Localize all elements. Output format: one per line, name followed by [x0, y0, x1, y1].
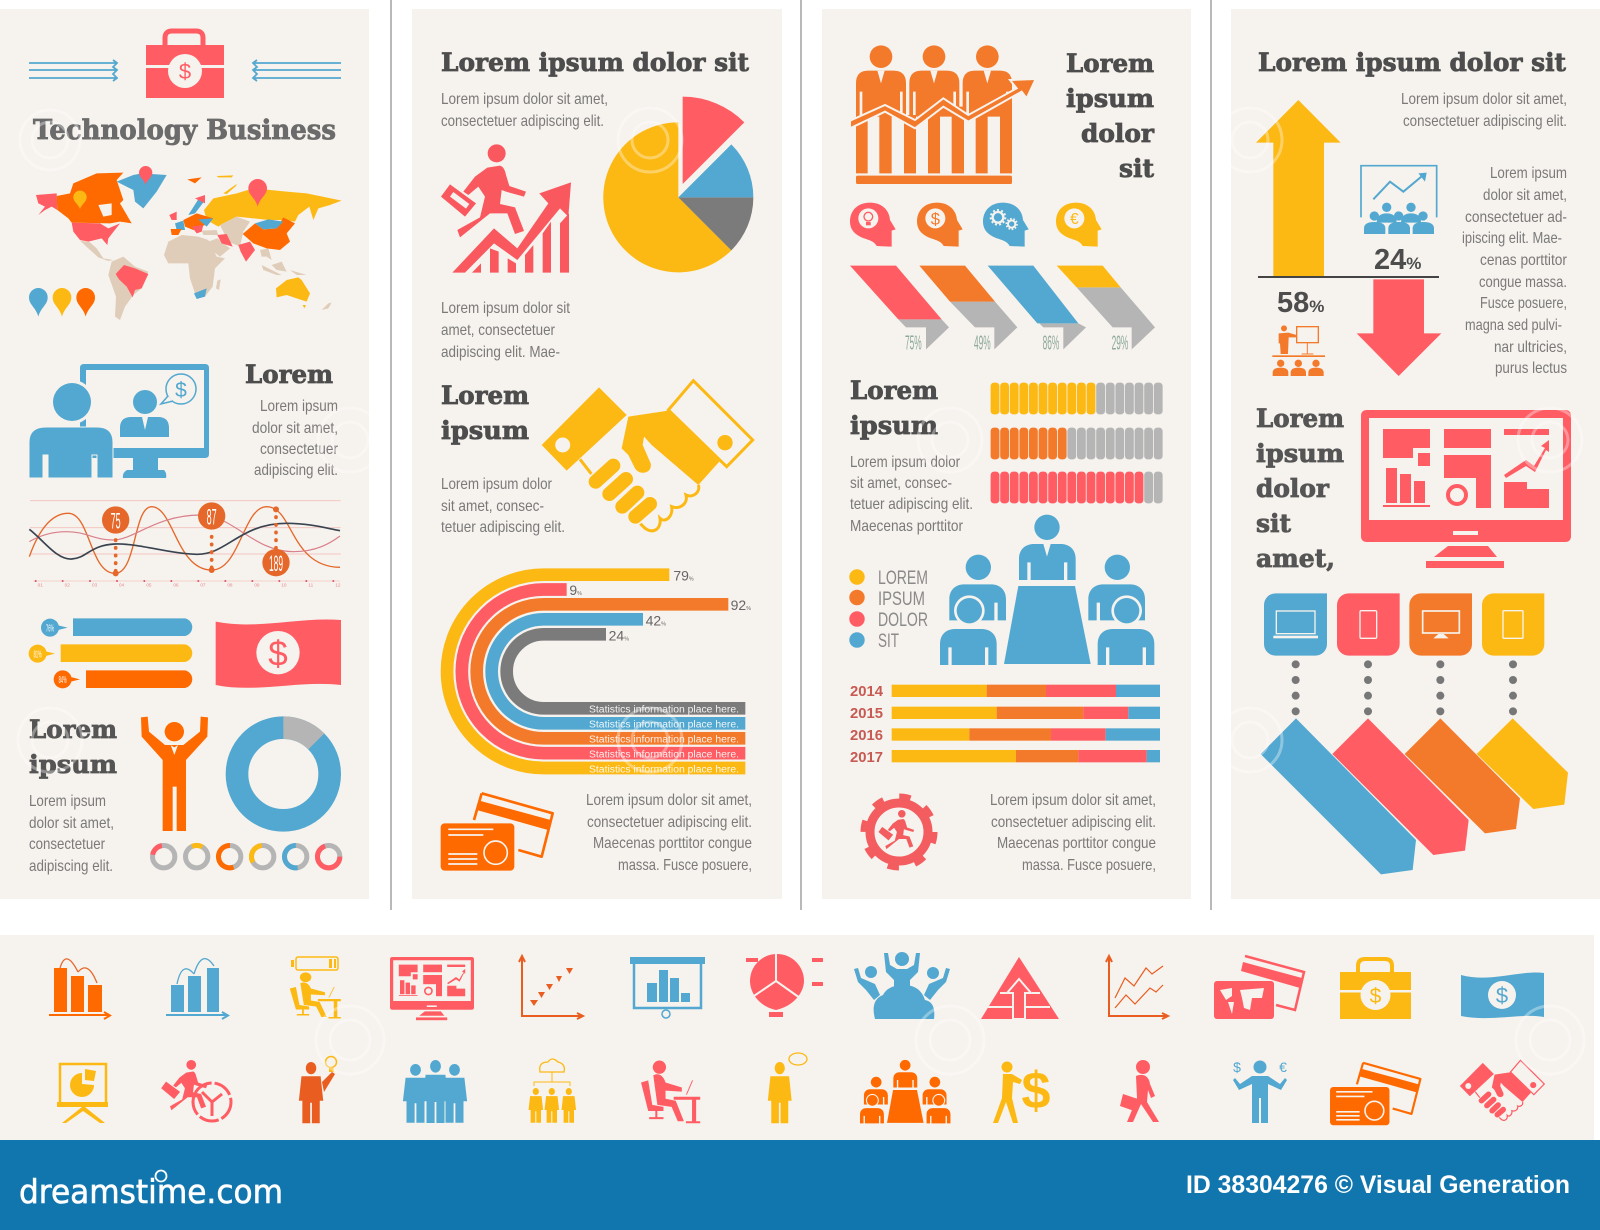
- arrows: right blue lines: [253, 60, 341, 81]
- ribbon chart: 29%: 29%: [1112, 331, 1128, 354]
- footer credit: ID 38304276 © Visual Generation: [1186, 1171, 1570, 1199]
- icon: orange cards small: [1330, 1063, 1420, 1125]
- text block: handshake: [441, 476, 565, 536]
- icon: three businessmen: [403, 1060, 467, 1123]
- icon: head with euro: [1056, 203, 1102, 247]
- text block: column three bottom: consectetuer adipiscing elit.: [991, 814, 1156, 831]
- heading: lorem ipsum two: ipsum: [441, 416, 529, 445]
- heading: lorem ipsum dolor sit stacked: ipsum: [1066, 84, 1154, 113]
- text block: column four side: dolor sit amet,: [1483, 187, 1567, 204]
- icon: pink handshake small: [1460, 1060, 1544, 1120]
- icon: projector board: [630, 957, 705, 1018]
- icon: pink cards with map: [1214, 956, 1304, 1019]
- icon: scatter axes: [519, 956, 583, 1019]
- heading: lorem ipsum three: [850, 376, 938, 440]
- device tiles: [1264, 593, 1544, 656]
- text block: handshake: Lorem ipsum dolor: [441, 476, 553, 493]
- text block: column two bottom: massa. Fusce posuere,: [618, 857, 752, 874]
- rainbow bar chart: 9%: [569, 582, 582, 598]
- icon: team on cloud: [854, 952, 950, 1019]
- text block: column four side: nar ultricies,: [1494, 339, 1567, 356]
- panel: icon strip: [0, 935, 1594, 1140]
- icon: man with dollar and euro: [1233, 1059, 1287, 1123]
- legend: LOREM: [878, 568, 928, 589]
- ribbon chart: 29%: [1057, 266, 1155, 354]
- text block: column three: tetuer adipiscing elit.: [850, 496, 973, 513]
- text block: column two left: amet, consectetuer: [441, 322, 556, 339]
- heading: lorem ipsum three: ipsum: [850, 411, 938, 440]
- icon: video conference monitor: [29, 364, 209, 478]
- map pin: canada: [73, 191, 87, 209]
- heading: lorem ipsum three: Lorem: [850, 376, 938, 405]
- icon: man with dollar and euro: €: [1279, 1059, 1287, 1075]
- icon: man with dollar and euro: $: [1233, 1059, 1241, 1075]
- rainbow bar chart: 92%: [731, 597, 751, 613]
- text block: column three bottom: Maecenas porttitor congue: [997, 835, 1156, 852]
- icon: yellow briefcase: [1340, 959, 1411, 1019]
- rainbow chart captions: Statistics information place here.: [589, 734, 739, 746]
- icon: team with growth chart: [850, 45, 1036, 184]
- device: desktop: [1409, 593, 1472, 656]
- ribbon chart: 86%: 86%: [1043, 331, 1059, 354]
- line chart: 03: [92, 583, 98, 588]
- icon: head with light bulb: [850, 203, 896, 247]
- icon: blue banknote: $: [1496, 983, 1508, 1008]
- year labels: 2015: [850, 705, 883, 722]
- heading: lorem ipsum dolor sit amet: dolor: [1256, 474, 1330, 503]
- panel: technology business: [0, 9, 369, 899]
- stat: 58%: 58%: [1277, 287, 1324, 319]
- text block: lorem ipsum left: consectetuer: [29, 836, 106, 853]
- heading: lorem ipsum dolor sit amet: ipsum: [1256, 439, 1344, 468]
- icon: meeting table: [940, 515, 1154, 665]
- device: laptop: [1264, 593, 1327, 656]
- segmented progress bars: [991, 383, 1162, 503]
- heading: lorem ipsum dolor sit stacked: [1066, 49, 1155, 183]
- heading: lorem ipsum dolor sit stacked: sit: [1119, 154, 1154, 183]
- text block: column three: Maecenas porttitor: [850, 518, 964, 535]
- donut chart: [237, 728, 330, 820]
- icon: red dashboard monitor: [1361, 410, 1571, 568]
- map pin: russia: [248, 179, 267, 207]
- year labels: [850, 683, 884, 766]
- heading: lorem: Lorem: [245, 360, 333, 389]
- icon: cloud team: [529, 1059, 576, 1123]
- text block: column four intro: consectetuer adipiscing elit.: [1403, 113, 1567, 130]
- text block: column three bottom: [990, 792, 1156, 874]
- icon: businessman arms raised: [141, 717, 208, 831]
- icon: head with euro: €: [1070, 211, 1079, 228]
- icon: presentation audience: [1361, 166, 1437, 234]
- text block: column two bottom: consectetuer adipiscing elit.: [587, 814, 752, 831]
- stat: 24%: 24%: [1374, 244, 1421, 276]
- device: phone: [1337, 593, 1400, 656]
- legend: IPSUM: [878, 589, 925, 610]
- arrow: yellow up: [1256, 100, 1341, 277]
- panel: column two: [412, 9, 782, 899]
- text block: column three bottom: massa. Fusce posuere,: [1022, 857, 1156, 874]
- text block: lorem ipsum left: adipiscing elit.: [29, 858, 113, 875]
- rainbow chart captions: [589, 704, 739, 775]
- year labels: 2014: [850, 683, 884, 700]
- icon: video conference monitor: $: [175, 379, 187, 402]
- text block: column two left: Lorem ipsum dolor sit: [441, 300, 570, 317]
- horizontal bars with bubbles: [29, 618, 192, 688]
- horizontal bars with bubbles: 81%: [34, 649, 42, 660]
- text block: lorem ipsum left: dolor sit amet,: [29, 815, 114, 832]
- heading: lorem ipsum two: [441, 381, 529, 445]
- ribbon arrows: [1261, 718, 1568, 874]
- text block: column four intro: [1401, 91, 1567, 130]
- heading: column four: Lorem ipsum dolor sit: [1258, 48, 1566, 77]
- line chart: 12: [335, 583, 341, 588]
- rainbow chart captions: Statistics information place here.: [589, 720, 739, 730]
- icon: yellow handshake: [542, 381, 753, 531]
- ribbon chart: 49%: [919, 266, 1017, 354]
- heading: lorem ipsum: [29, 715, 117, 779]
- icon: man with speech bubble: [768, 1053, 807, 1123]
- text block: column two left: [441, 300, 570, 361]
- ribbon chart: 75%: [850, 266, 949, 354]
- icon: desk worker: [641, 1061, 700, 1123]
- arrows: left blue lines: [29, 60, 117, 81]
- heading: lorem ipsum dolor sit amet: Lorem: [1256, 404, 1344, 433]
- small donut row: [151, 841, 340, 872]
- heading: lorem ipsum two: Lorem: [441, 381, 529, 410]
- heading: lorem ipsum dolor sit amet: [1256, 404, 1344, 573]
- line chart: 05: [146, 583, 152, 588]
- text block: lorem ipsum right: dolor sit amet,: [252, 420, 338, 437]
- text block: column four side: congue massa.: [1479, 274, 1567, 291]
- line chart: 04: [119, 583, 125, 588]
- rainbow bar chart: [447, 568, 751, 768]
- year labels: 2016: [850, 727, 883, 744]
- text block: lorem ipsum right: Lorem ipsum: [260, 398, 338, 415]
- icon: gear with runner: [865, 798, 933, 866]
- icon: tired worker and battery: [290, 957, 341, 1018]
- footer logo: dreamstime.com: [19, 1172, 283, 1211]
- text block: intro: consectetuer adipiscing elit.: [441, 113, 604, 130]
- line chart: 10: [281, 583, 287, 588]
- icon: red briefcase: $: [179, 59, 191, 84]
- icon: line chart axes: [1106, 956, 1168, 1019]
- icon: runner climbing growth chart: [441, 144, 571, 273]
- legend: [849, 568, 928, 652]
- heading: lorem ipsum: ipsum: [29, 750, 117, 779]
- text block: column four side: ipiscing elit. Mae-: [1462, 230, 1562, 247]
- panel: column four: [1231, 9, 1600, 899]
- text block: lorem ipsum right: adipiscing elit.: [254, 462, 338, 479]
- line chart: 189: [269, 551, 283, 576]
- map pin: greenland: [139, 166, 152, 185]
- legend: DOLOR: [878, 610, 928, 631]
- icon: trainer and audience: [1272, 325, 1325, 376]
- icon: head with dollar: $: [931, 209, 940, 228]
- line chart: 01: [38, 583, 43, 588]
- text block: column four side: [1462, 165, 1568, 377]
- text block: column two left: adipiscing elit. Mae-: [441, 344, 560, 361]
- text block: column four side: Lorem ipsum: [1490, 165, 1567, 182]
- icon: head with gears: [983, 203, 1029, 247]
- horizontal bars with bubbles: 76%: [46, 623, 54, 634]
- rainbow bar chart: 42%: [646, 612, 666, 628]
- ribbon chart: 86%: [988, 266, 1086, 354]
- legend: SIT: [878, 631, 899, 652]
- line chart: 08: [227, 583, 233, 588]
- icon: credit cards: [441, 793, 553, 871]
- text block: column four side: Fusce posuere,: [1480, 295, 1567, 312]
- heading: lorem ipsum dolor sit amet: sit: [1256, 509, 1291, 538]
- text block: column four side: purus lectus: [1495, 360, 1567, 377]
- icon: man with idea: [299, 1056, 336, 1123]
- icon: yellow briefcase: $: [1370, 985, 1382, 1008]
- ribbon chart: 75%: 75%: [905, 331, 922, 354]
- rainbow chart captions: Statistics information place here.: [589, 764, 739, 775]
- icon: orange meeting: [860, 1060, 950, 1123]
- panel: column three: [822, 9, 1191, 899]
- text block: column three: [850, 454, 973, 535]
- icon: presentation with pie: [57, 1064, 108, 1123]
- icon: man pushing dollar: $: [1022, 1062, 1051, 1120]
- text block: lorem ipsum left: [29, 793, 114, 875]
- text block: column four side: cenas porttitor: [1480, 252, 1568, 269]
- icon: blue banknote: [1461, 973, 1544, 1018]
- year labels: 2017: [850, 749, 883, 766]
- text block: column four intro: Lorem ipsum dolor sit amet,: [1401, 91, 1567, 108]
- rainbow chart captions: Statistics information place here.: [589, 750, 739, 760]
- text block: handshake: sit amet, consec-: [441, 498, 544, 515]
- line chart: 07: [200, 583, 206, 588]
- text block: lorem ipsum left: Lorem ipsum: [29, 793, 106, 810]
- icon: head with dollar: [917, 203, 963, 247]
- heading: lorem ipsum dolor sit: Lorem ipsum dolor sit: [441, 48, 749, 77]
- arrow: red down: [1357, 279, 1441, 376]
- text block: column three: Lorem ipsum dolor: [850, 454, 961, 471]
- heading: lorem ipsum: Lorem: [29, 715, 117, 744]
- text block: handshake: tetuer adipiscing elit.: [441, 519, 565, 536]
- world map: [36, 173, 342, 320]
- stacked bar chart: years: [892, 685, 1160, 762]
- line chart: [29, 501, 341, 588]
- text block: column two bottom: [586, 792, 752, 874]
- icon: falling bars: [49, 959, 110, 1019]
- rainbow bar chart: 79%: [673, 568, 694, 584]
- icon: red briefcase: [146, 31, 224, 98]
- text block: column two bottom: Maecenas porttitor congue: [593, 835, 752, 852]
- text block: lorem ipsum right: [252, 398, 339, 479]
- text block: lorem ipsum right: consectetuer: [260, 441, 339, 458]
- dotted connectors: [1292, 660, 1517, 715]
- legend pins: [29, 288, 95, 317]
- heading: lorem ipsum dolor sit stacked: dolor: [1081, 119, 1155, 148]
- title: Technology Business: [33, 115, 336, 146]
- text block: column three bottom: Lorem ipsum dolor sit amet,: [990, 792, 1156, 809]
- heading: lorem ipsum dolor sit stacked: Lorem: [1066, 49, 1154, 78]
- icon: walking businessman: [1120, 1060, 1159, 1122]
- rainbow chart captions: Statistics information place here.: [589, 704, 739, 716]
- text block: intro: [441, 91, 608, 130]
- line chart: 11: [308, 583, 314, 588]
- heading: lorem ipsum dolor sit amet: amet,: [1256, 544, 1335, 573]
- line chart: 09: [254, 583, 260, 588]
- horizontal bars with bubbles: 84%: [59, 675, 67, 686]
- device: tablet: [1482, 593, 1544, 656]
- pie chart: [603, 97, 753, 272]
- line chart: 75: [111, 508, 121, 533]
- text block: column four side: consectetuer ad-: [1465, 209, 1567, 226]
- line chart: 87: [207, 504, 217, 529]
- text block: column four side: magna sed pulvi-: [1465, 317, 1562, 334]
- icon: red banknote: $: [268, 634, 288, 673]
- icon: red banknote: [216, 619, 341, 688]
- icon: rising bars: [166, 959, 228, 1019]
- line chart: 02: [65, 583, 70, 588]
- text block: column three: sit amet, consec-: [850, 475, 952, 492]
- footer band: [0, 1140, 1600, 1230]
- text block: intro: Lorem ipsum dolor sit amet,: [441, 91, 608, 108]
- icon: small dashboard monitor: [390, 957, 474, 1020]
- line chart: 06: [173, 583, 179, 588]
- rainbow bar chart: 24%: [609, 627, 629, 643]
- ribbon chart: 49%: 49%: [974, 331, 991, 354]
- icon: pie bulb: [746, 953, 823, 1017]
- icon: man pushing dollar: [993, 1062, 1051, 1123]
- icon: pyramid with arrow: [981, 957, 1059, 1019]
- text block: column two bottom: Lorem ipsum dolor sit amet,: [586, 792, 752, 809]
- icon: runner and clock: [161, 1060, 231, 1121]
